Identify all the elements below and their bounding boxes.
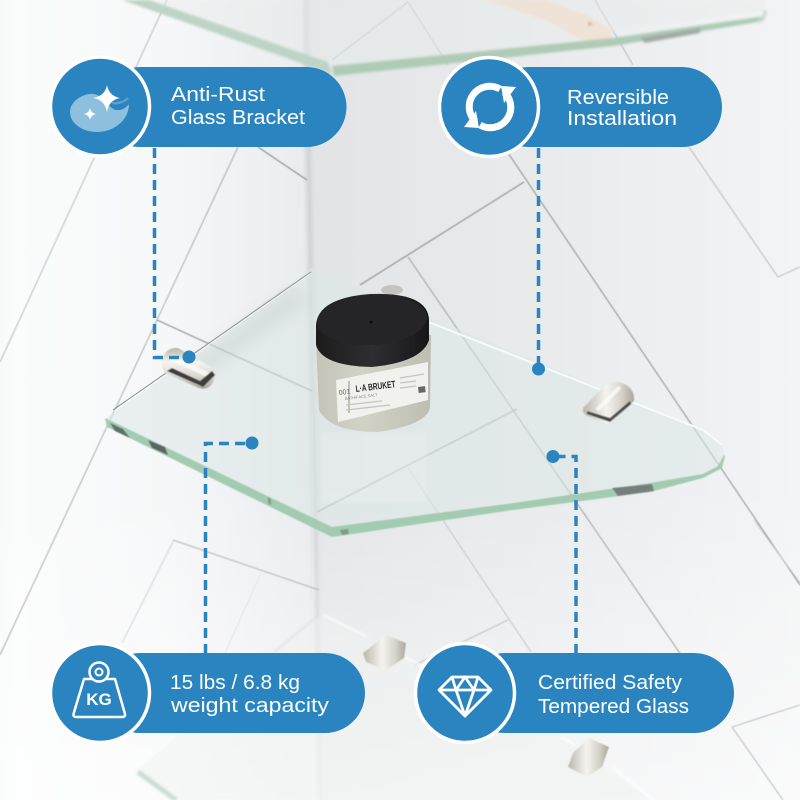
badge: anti-rust glass bracket	[50, 57, 346, 156]
jar	[316, 292, 431, 502]
shadow under the back edges	[190, 295, 300, 375]
icon: circular arrows	[464, 86, 516, 128]
label: Tempered Glass	[538, 696, 689, 718]
label: 15 lbs / 6.8 kg	[170, 672, 300, 694]
jar label	[336, 362, 428, 422]
icon: diamond	[439, 677, 491, 716]
callout connector: weight capacity	[206, 436, 258, 654]
label: Reversible	[567, 87, 669, 109]
jar body	[316, 335, 431, 432]
upper shelf with brush, out of focus	[122, 0, 765, 76]
jar reflection	[322, 432, 427, 502]
badge: certified safety tempered glass	[416, 644, 734, 742]
main glass shelf	[105, 268, 725, 537]
lower shelf, out of focus	[138, 615, 653, 800]
label: Glass Bracket	[171, 107, 305, 129]
right bracket	[583, 382, 634, 423]
icon: kg weight: KG	[86, 690, 112, 709]
callout connector: anti-rust bracket	[154, 148, 196, 364]
shelf glass pane	[105, 268, 724, 527]
badge: reversible installation	[440, 58, 722, 156]
back bracket behind jar	[381, 285, 403, 295]
icon: kg weight	[73, 662, 125, 717]
label: Anti-Rust	[171, 84, 266, 106]
label: Certified Safety	[538, 672, 682, 694]
lower shelf bracket, left	[363, 635, 406, 670]
lower shelf bracket, right	[568, 738, 609, 777]
label: weight capacity	[170, 695, 329, 717]
left bracket	[162, 348, 215, 389]
label: Installation	[567, 108, 677, 130]
badge: weight capacity	[50, 644, 365, 742]
shelf front edge in green glass	[105, 418, 725, 537]
shelf back edges	[113, 272, 311, 410]
jar label: BATH/FACE SALT	[345, 392, 378, 401]
jar lid	[316, 294, 429, 367]
jar label: 001	[338, 389, 351, 397]
callout connector: tempered glass	[546, 450, 576, 654]
jar label: L·A BRUKET	[355, 379, 396, 395]
icon: water wave with sparkles	[70, 85, 129, 132]
callout connector: reversible installation	[532, 148, 545, 376]
